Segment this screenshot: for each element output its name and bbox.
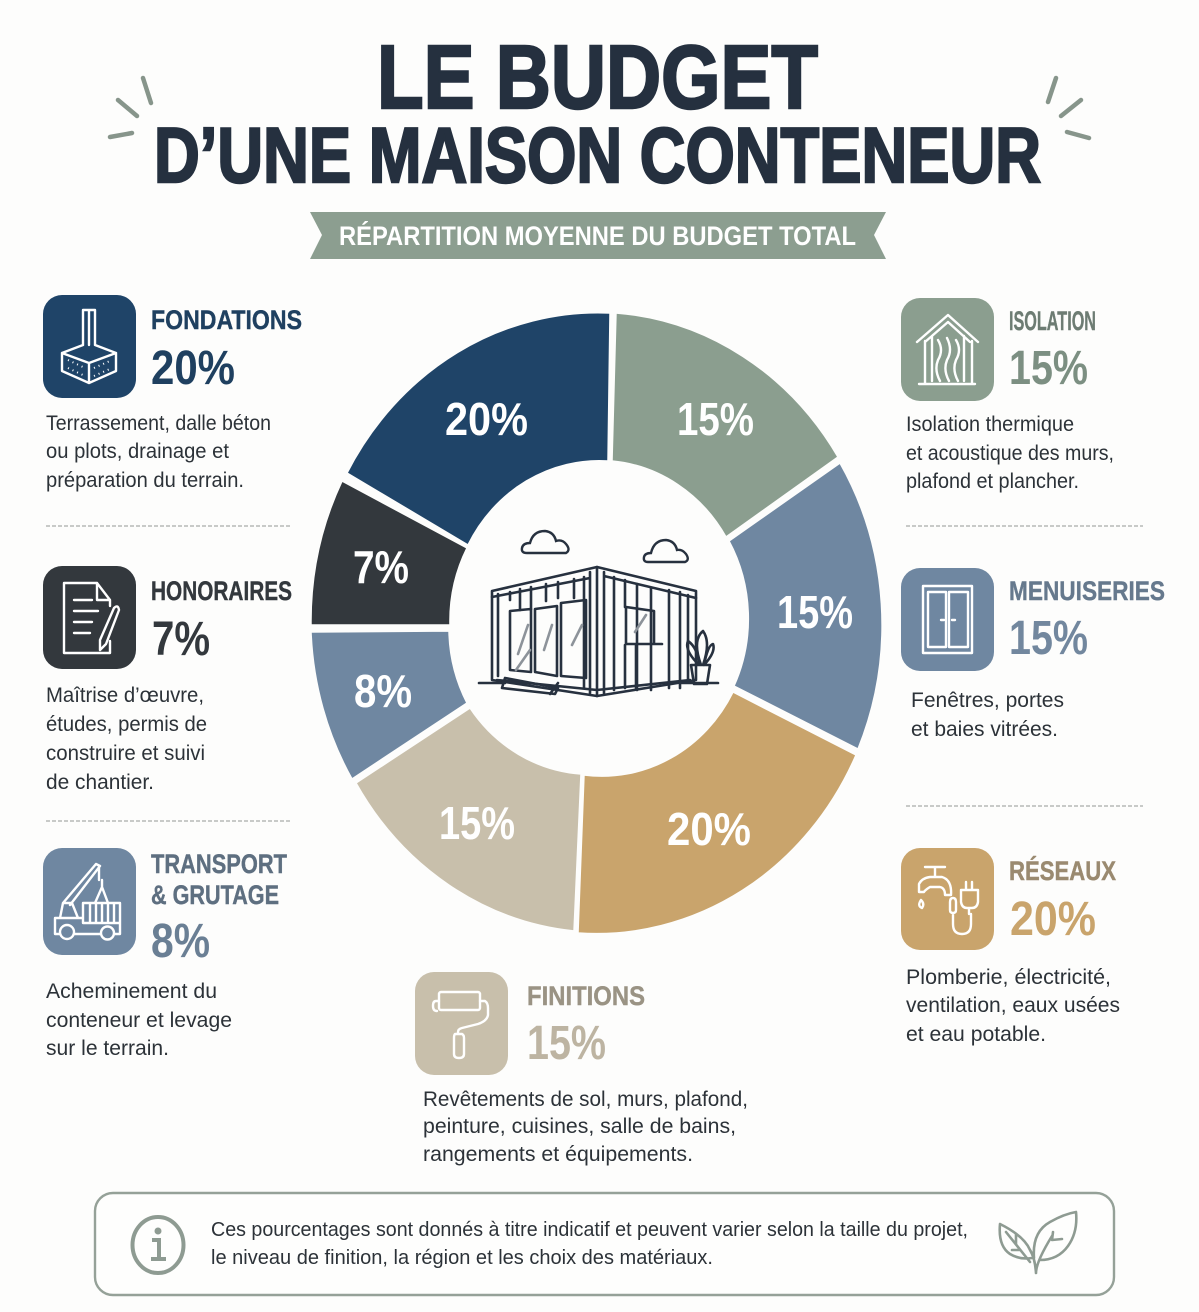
description [911, 689, 1064, 741]
description: peinture, cuisines, salle de bains, [423, 1115, 736, 1138]
heading: TRANSPORT [151, 849, 287, 879]
description: de chantier. [46, 771, 154, 794]
footer note panel [95, 1193, 1114, 1295]
segment: transport 8% [311, 631, 467, 779]
percentage: 15% [1009, 342, 1088, 395]
description: sur le terrain. [46, 1037, 169, 1060]
percentage: 20% [151, 342, 235, 395]
plant [687, 631, 714, 684]
container body [479, 567, 718, 696]
heading: & GRUTAGE [151, 880, 279, 910]
description: préparation du terrain. [46, 469, 244, 492]
title [154, 28, 1041, 199]
description: Terrassement, dalle béton [46, 412, 271, 435]
description [46, 980, 232, 1060]
decorative rays left [110, 78, 151, 137]
icon: document [43, 566, 136, 669]
description: Maîtrise d’œuvre, [46, 684, 204, 707]
icon: info [132, 1217, 184, 1273]
description: conteneur et levage [46, 1009, 232, 1032]
description: Revêtements de sol, murs, plafond, [423, 1088, 748, 1111]
description: ou plots, drainage et [46, 440, 229, 463]
description: et baies vitrées. [911, 718, 1058, 741]
percentage: 15% [1009, 612, 1088, 665]
description: études, permis de [46, 713, 207, 736]
description: Isolation thermique [906, 413, 1074, 436]
subtitle ribbon [310, 212, 886, 259]
description: Acheminement du [46, 980, 217, 1003]
description [46, 684, 207, 794]
segment: réseaux 20% [578, 692, 856, 934]
segment: fondations 20%: 20% [445, 393, 528, 445]
segment: honoraires 7% [311, 481, 467, 625]
segment: fondations 20% [347, 313, 610, 545]
description [906, 413, 1114, 493]
segment: finitions 15% [356, 708, 581, 931]
description: plafond et plancher. [906, 470, 1079, 493]
segment: transport 8%: 8% [354, 665, 412, 717]
icon: insulated house [901, 298, 994, 401]
description: construire et suivi [46, 742, 205, 765]
percentage: 7% [152, 613, 210, 666]
icon: window [901, 568, 994, 671]
description: rangements et équipements. [423, 1143, 693, 1166]
percentage: 8% [151, 915, 210, 968]
segment: honoraires 7%: 7% [353, 541, 409, 593]
description [46, 412, 271, 492]
subtitle ribbon: RÉPARTITION MOYENNE DU BUDGET TOTAL [339, 220, 856, 251]
panel: réseaux [901, 848, 1120, 1046]
panel: isolation [901, 298, 1114, 493]
segment: isolation 15%: 15% [677, 393, 754, 445]
description: Fenêtres, portes [911, 689, 1064, 712]
heading: MENUISERIES [1009, 576, 1165, 606]
note text: Ces pourcentages sont donnés à titre indicatif et peuvent varier selon la taille du projet, [211, 1218, 968, 1241]
heading: FONDATIONS [151, 305, 302, 335]
segment: menuiseries 15%: 15% [777, 586, 853, 638]
icon: paint roller [415, 972, 508, 1075]
description: et acoustique des murs, [906, 442, 1114, 465]
heading: ISOLATION [1009, 306, 1096, 336]
panel: finitions [415, 972, 748, 1166]
percentage: 20% [1010, 893, 1096, 946]
segment: finitions 15%: 15% [439, 797, 515, 849]
segment: réseaux 20%: 20% [667, 803, 751, 855]
icon: crane truck [43, 848, 136, 955]
heading: RÉSEAUX [1009, 855, 1116, 886]
description: ventilation, eaux usées [906, 994, 1120, 1017]
heading: FINITIONS [527, 981, 645, 1011]
description: et eau potable. [906, 1023, 1046, 1046]
segment: menuiseries 15% [729, 463, 882, 749]
donut chart [311, 313, 882, 934]
note text [211, 1218, 968, 1269]
segment: isolation 15% [612, 313, 838, 537]
panel: fondations [43, 295, 302, 492]
description [423, 1088, 748, 1166]
decorative rays right [1048, 78, 1089, 138]
panel: transport [43, 848, 287, 1060]
icon: foundation [43, 295, 136, 398]
icon: leaves [1000, 1212, 1076, 1273]
heading [151, 849, 287, 910]
panel: honoraires [43, 566, 292, 794]
note text: le niveau de finition, la région et les choix des matériaux. [211, 1246, 713, 1269]
title: LE BUDGET [377, 28, 818, 128]
clouds [522, 531, 688, 562]
heading: HONORAIRES [151, 576, 292, 606]
description [906, 966, 1120, 1046]
percentage: 15% [527, 1017, 606, 1070]
icon: container house [479, 531, 718, 696]
panel: menuiseries [901, 568, 1165, 741]
icon: tap and plug [901, 848, 994, 950]
description: Plomberie, électricité, [906, 966, 1111, 989]
